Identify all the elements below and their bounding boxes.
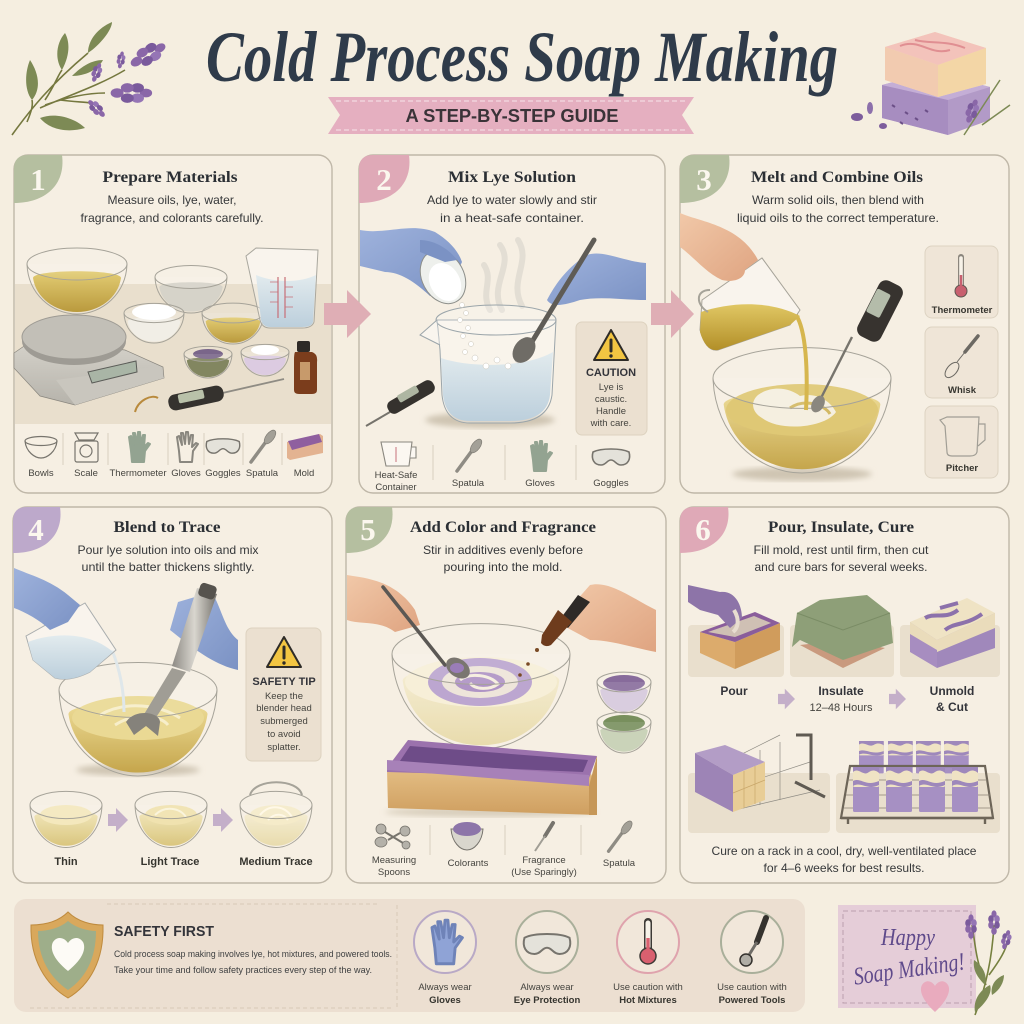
callout: safety tip: splatter.	[267, 742, 301, 753]
tool icons row	[25, 428, 323, 479]
card: pitcher	[925, 406, 998, 478]
icon: fragrance dropper	[535, 823, 553, 851]
tool labels: Bowls	[28, 468, 54, 479]
tool labels: Goggles	[593, 478, 629, 489]
illustration: steam	[484, 240, 523, 310]
icon: gloves	[531, 441, 552, 471]
illustration: measuring cup	[246, 248, 318, 328]
description	[427, 193, 597, 225]
tool icons row	[372, 819, 636, 878]
tool labels: Measuring	[372, 855, 416, 866]
description: Add lye to water slowly and stir	[427, 193, 597, 207]
cure note: for 4–6 weeks for best results.	[764, 861, 924, 875]
callout: safety tip	[246, 628, 321, 761]
icon: goggles	[206, 439, 240, 453]
tool labels: Spatula	[246, 468, 279, 479]
step number 5: 5	[360, 512, 376, 547]
cure note: Cure on a rack in a cool, dry, well-ventilated place	[712, 844, 977, 858]
illustration: blue glove with lye cup	[360, 228, 475, 312]
description: until the batter thickens slightly.	[82, 560, 255, 574]
panel: step 6 pour insulate cure	[680, 507, 1009, 883]
tool labels: Heat-Safe	[375, 470, 417, 481]
tool labels: Spatula	[452, 478, 485, 489]
step labels: & Cut	[936, 700, 968, 714]
description: fragrance, and colorants carefully.	[80, 211, 264, 225]
step number 4	[13, 507, 61, 553]
panel: step 5 add color and fragrance	[346, 507, 666, 883]
heading: Blend to Trace	[114, 519, 220, 536]
card: pitcher: Pitcher	[946, 463, 978, 474]
safety item: gloves: Gloves	[429, 995, 461, 1006]
callout: safety tip: submerged	[260, 716, 308, 727]
step number 1	[14, 155, 62, 203]
scene: insulate under towel	[790, 595, 894, 677]
step labels: 12–48 Hours	[810, 702, 873, 714]
illustration: glass bowl with oils	[713, 348, 891, 481]
safety item: eye protection	[514, 911, 580, 1006]
arrow: pour to insulate	[778, 689, 795, 709]
tool labels: Spatula	[603, 858, 636, 869]
description	[78, 543, 258, 574]
step number 3	[680, 155, 729, 203]
callout: caution: caustic.	[595, 394, 627, 405]
icon: heart	[921, 981, 949, 1012]
icon: measuring spoons	[375, 824, 410, 849]
description: Pour lye solution into oils and mix	[78, 543, 258, 557]
illustration: thermometer	[135, 379, 284, 412]
callout: caution: with care.	[590, 418, 631, 429]
step number 2: 2	[376, 162, 392, 197]
safety text: Take your time and follow safety practices every step of the way.	[114, 965, 372, 976]
tool labels: Gloves	[525, 478, 555, 489]
tool labels: Goggles	[205, 468, 241, 479]
tool labels: Thermometer	[109, 468, 167, 479]
step labels: Pour	[720, 684, 748, 698]
tool labels: Fragrance	[522, 855, 566, 866]
arrow: step 1 to 2	[324, 290, 371, 338]
safety item: gloves: Always wear	[418, 982, 472, 993]
description: Warm solid oils, then blend with	[752, 193, 924, 207]
illustration: thermometer	[366, 378, 437, 426]
illustration: falling lye beads	[458, 302, 521, 369]
icon: heat-safe container	[381, 442, 416, 466]
tool labels	[375, 470, 629, 493]
trace labels: Thin	[54, 856, 78, 868]
arrow: insulate to unmold	[889, 689, 906, 709]
illustration: stick blender	[126, 582, 218, 736]
arrow: light to medium	[213, 808, 233, 832]
trace labels: Medium Trace	[239, 856, 313, 868]
heading: Prepare Materials	[102, 169, 238, 186]
illustration: blue glove	[14, 568, 80, 630]
panel: step 2 mix lye solution	[359, 155, 665, 493]
safety heading: SAFETY FIRST	[114, 923, 214, 940]
closing card: happy soap making: Soap Making!	[852, 948, 967, 991]
safety item: gloves	[414, 911, 476, 1006]
illustration: glass cup with water	[420, 305, 556, 428]
tool labels: Scale	[74, 468, 98, 479]
table band	[15, 284, 331, 424]
icon: sage gloves	[129, 432, 150, 462]
panel: safety first banner	[14, 899, 805, 1012]
scene: pour into mold	[688, 585, 784, 677]
safety item: powered tools: Use caution with	[717, 982, 787, 993]
illustration: kitchen scale	[14, 315, 164, 405]
scene: curing rack with bars	[836, 741, 1000, 833]
callout: safety tip: to avoid	[267, 729, 301, 740]
step number 4: 4	[28, 512, 44, 547]
step number 6	[680, 507, 729, 553]
callout: safety tip: blender head	[256, 703, 312, 714]
heading: Add Color and Fragrance	[410, 519, 596, 536]
illustration: right hand with dropper	[518, 584, 656, 677]
callout: caution: Lye is	[599, 382, 623, 393]
icon: bowl	[25, 436, 57, 458]
closing card: happy soap making	[838, 905, 976, 1012]
callout: safety tip: SAFETY TIP	[252, 676, 316, 688]
safety item: powered tools: Powered Tools	[719, 995, 785, 1006]
trace stage: light	[135, 791, 207, 848]
scene: unmold soap loaf	[900, 598, 1000, 677]
description: Stir in additives evenly before	[423, 543, 583, 557]
card: thermometer: Thermometer	[932, 305, 993, 316]
panel: step 3 melt and combine oils	[680, 155, 1009, 493]
illustration: hand	[680, 213, 758, 281]
illustration: blender hand	[170, 592, 238, 670]
illustration: bowl with swirl	[392, 624, 570, 749]
step number 5	[346, 507, 393, 553]
icon: lavender sprig top left	[12, 22, 170, 135]
illustration: soap mold	[385, 740, 597, 817]
safety item: powered tools	[717, 911, 787, 1006]
step labels	[720, 684, 974, 714]
step number 3: 3	[696, 162, 712, 197]
step number 6: 6	[695, 512, 711, 547]
safety item: eye protection: Always wear	[520, 982, 574, 993]
illustration: pitcher of lye	[26, 603, 116, 679]
icon: colorants	[451, 822, 483, 850]
safety item: hot mixtures: Use caution with	[613, 982, 683, 993]
card: whisk	[925, 327, 998, 398]
illustration: pitcher pouring oil	[699, 258, 800, 350]
icon: spatula	[251, 428, 278, 462]
description	[754, 543, 929, 574]
step number 1: 1	[30, 162, 46, 197]
trace labels	[54, 856, 313, 868]
trace stage: medium	[240, 782, 312, 848]
step labels: Unmold	[930, 684, 974, 698]
tool labels	[372, 855, 636, 878]
safety item: hot mixtures: Hot Mixtures	[619, 995, 677, 1006]
title: Cold Process Soap Making	[206, 17, 838, 97]
icon: spatula	[457, 437, 484, 471]
tool labels: Container	[375, 482, 417, 493]
description	[423, 543, 583, 574]
tool labels: Spoons	[378, 867, 410, 878]
callout: caution: CAUTION	[586, 367, 636, 379]
description	[737, 193, 939, 225]
safety text	[114, 949, 392, 976]
icon: goggles	[592, 449, 630, 465]
tool icons row	[375, 437, 630, 493]
safety item: hot mixtures	[613, 911, 683, 1006]
illustration: mixing bowl with batter	[59, 662, 217, 776]
illustration: lye stream	[112, 650, 124, 712]
subtitle ribbon	[328, 97, 694, 134]
arrow: thin to light	[108, 808, 128, 832]
icon: shield with heart	[31, 912, 103, 998]
description: and cure bars for several weeks.	[754, 560, 928, 574]
tool labels: Gloves	[171, 468, 201, 479]
description: Fill mold, rest until firm, then cut	[754, 543, 929, 557]
tool labels: (Use Sparingly)	[511, 867, 577, 878]
icon: soap stack top right	[851, 32, 1010, 135]
icon: mold	[287, 434, 323, 460]
trace labels: Light Trace	[141, 856, 199, 868]
description: pouring into the mold.	[444, 560, 562, 574]
icon: scale	[75, 433, 98, 462]
heading: Pour, Insulate, Cure	[768, 519, 914, 536]
trace stage: thin	[30, 791, 102, 848]
panel: step 4 blend to trace	[13, 507, 332, 883]
callout: caution	[576, 322, 647, 435]
step labels: Insulate	[818, 684, 864, 698]
illustration: digital thermometer	[808, 277, 906, 415]
step number 2	[359, 155, 409, 203]
closing card: happy soap making: Happy	[880, 925, 935, 951]
illustration: amber bottle	[294, 341, 317, 394]
tool labels: Colorants	[448, 858, 489, 869]
heading: Melt and Combine Oils	[751, 169, 923, 186]
safety item: eye protection: Eye Protection	[514, 995, 580, 1006]
card: thermometer	[925, 246, 998, 318]
card: whisk: Whisk	[948, 385, 977, 396]
illustration: colorant bowls	[597, 672, 651, 753]
scene: cutting loaf	[688, 735, 830, 833]
icon: spatula	[609, 819, 634, 851]
panel: step 1 prepare materials	[14, 155, 332, 493]
safety text: Cold process soap making involves lye, hot mixtures, and powered tools.	[114, 949, 392, 960]
icon: lavender sprig bottom right	[965, 910, 1013, 1015]
illustration: left hand with spoon	[347, 575, 474, 683]
description: liquid oils to the correct temperature.	[737, 211, 939, 225]
tool labels	[28, 468, 314, 479]
illustration: oil stream	[796, 315, 807, 410]
icon: outline gloves	[177, 432, 198, 462]
description	[80, 193, 264, 225]
arrow: step 2 to 3	[651, 290, 694, 338]
illustration: measuring bowls	[27, 248, 289, 378]
callout: safety tip: Keep the	[265, 691, 303, 702]
callout: caution: Handle	[596, 406, 626, 417]
illustration: blue glove with spoon	[508, 240, 646, 367]
description: in a heat-safe container.	[440, 211, 584, 225]
cure note	[712, 844, 977, 875]
heading: Mix Lye Solution	[448, 169, 576, 186]
tool labels: Mold	[294, 468, 314, 479]
description: Measure oils, lye, water,	[108, 193, 236, 207]
subtitle ribbon: A STEP-BY-STEP GUIDE	[406, 106, 618, 126]
